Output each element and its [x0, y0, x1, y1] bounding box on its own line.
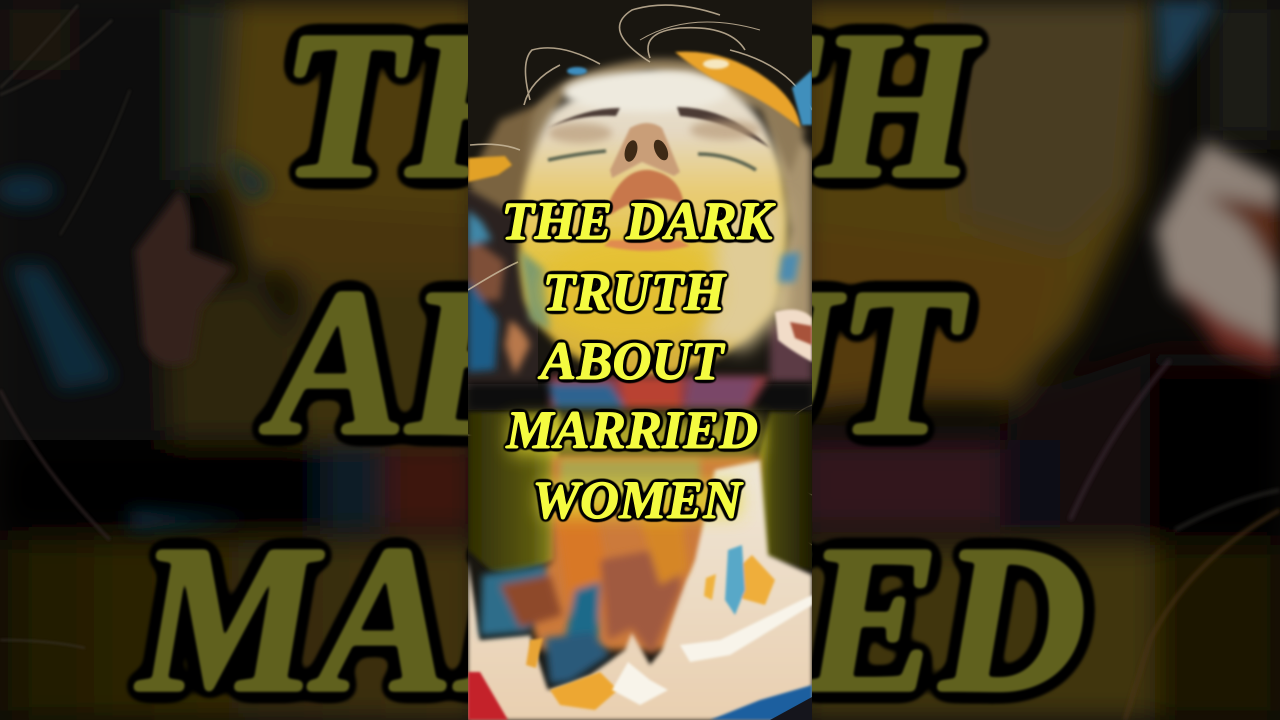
lower lip [604, 240, 690, 251]
blue paint mark at right of hair [792, 70, 812, 125]
yellow centre glow [540, 235, 720, 345]
right blurred backdrop [800, 0, 1280, 720]
olive glow right of the neck [755, 412, 812, 570]
main title: ABOUT [537, 331, 726, 391]
main title: WOMEN [532, 470, 744, 530]
main title: MARRIED [505, 400, 758, 460]
coloured throat under the chin [548, 376, 770, 408]
dark background of portrait [468, 0, 812, 720]
right backdrop ear [1155, 140, 1280, 370]
left backdrop blue smudges [0, 150, 270, 530]
right backdrop blue smudge [1155, 0, 1220, 90]
yellow glow behind the lower title lines [510, 418, 760, 516]
main title: TRUTH [542, 262, 727, 322]
eye shadows [548, 120, 760, 143]
right backdrop colour fields [800, 0, 1280, 720]
red paint bottom left [468, 672, 508, 720]
orange streak at the left [468, 156, 512, 182]
blond hair mass above the forehead [525, 59, 805, 175]
left backdrop hair strands [0, 5, 130, 648]
closed eyes [548, 151, 756, 170]
loose hair strands [468, 5, 812, 545]
right cheek cream [700, 200, 785, 350]
right backdrop hair strands [1070, 360, 1280, 720]
blue mark at hairline [567, 67, 587, 75]
face and jaw [519, 71, 786, 378]
nose [610, 123, 680, 178]
orange and blue dabs on the chest [526, 545, 775, 710]
nostrils [624, 140, 668, 162]
left backdrop colour fields [0, 0, 480, 720]
dark upper neck band [468, 384, 812, 410]
olive glow left of the neck [468, 412, 560, 572]
ear on the right [775, 310, 812, 362]
chest skin [468, 460, 812, 720]
main title [501, 191, 777, 530]
lips and mouth [610, 170, 684, 215]
dark hair bottom right [770, 697, 812, 720]
blue paint bottom right [710, 685, 812, 720]
cheek blue accent [778, 252, 800, 282]
eyebrows [548, 107, 770, 148]
neck paint colours [480, 460, 700, 684]
inner ear [790, 322, 812, 345]
white chest highlights [612, 595, 812, 705]
left cheek green shadow [520, 250, 550, 330]
backdrop enlarged title text [135, 0, 1087, 720]
central portrait panel [468, 0, 812, 720]
orange hair band [675, 52, 800, 128]
backdrop enlarged title text: ABOUT [260, 244, 969, 479]
main title: THE DARK [501, 191, 777, 251]
neck base colour [520, 455, 760, 650]
left blurred backdrop [0, 0, 480, 720]
left backdrop ear shape [135, 190, 235, 365]
hair left of the face [468, 100, 812, 382]
dark lower hair left [468, 190, 538, 390]
band highlight [703, 59, 729, 69]
forehead highlight [563, 72, 727, 112]
ear on the left [505, 320, 530, 375]
